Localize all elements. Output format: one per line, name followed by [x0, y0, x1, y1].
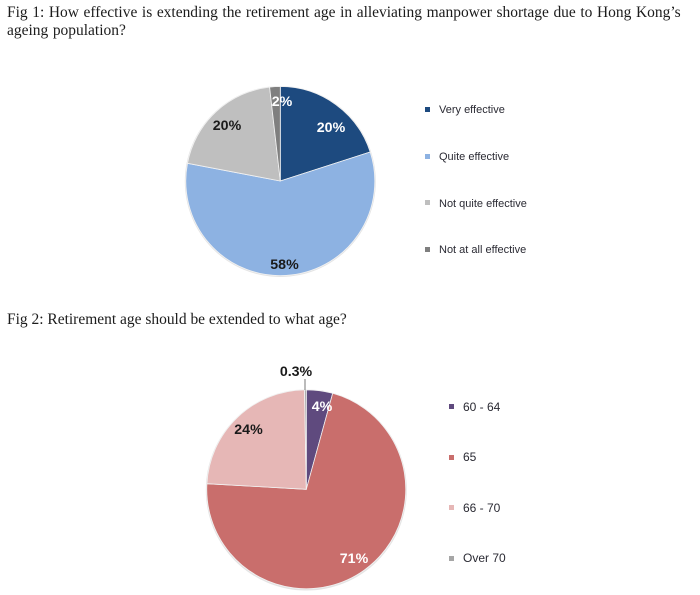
legend: figure 1: Not at all effective	[439, 244, 526, 256]
pie chart: figure 1: 2%	[272, 94, 293, 110]
legend: figure 1: Quite effective	[439, 151, 509, 163]
callout: 0.3% label with leader line: 0.3%	[280, 364, 313, 380]
legend: figure 2: 65	[463, 450, 477, 464]
callout: 0.3% label with leader line	[280, 364, 313, 390]
legend: figure 2	[449, 400, 506, 565]
legend: figure 1: Very effective	[439, 104, 505, 116]
pie chart: figure 1: 20%	[213, 118, 242, 134]
legend: figure 1	[425, 104, 527, 256]
pie chart: figure 1: 58%	[270, 257, 299, 273]
pie chart: figure 2: 24%	[234, 422, 263, 438]
pie chart: figure 2: 4%	[312, 399, 333, 415]
legend: figure 1: Not quite effective	[439, 198, 527, 210]
legend: figure 2: 60 - 64	[463, 400, 501, 414]
heading: figure 1 question	[7, 4, 681, 39]
heading: figure 1 question: Fig 1: How effective is extending the retirement age in alleviating manpower shortage due to Hong Kong’s	[7, 4, 681, 21]
pie chart: figure 1: 20%	[317, 120, 346, 136]
pie chart: figure 2	[206, 390, 407, 590]
pie chart: figure 1	[185, 86, 376, 277]
legend: figure 2: Over 70	[463, 551, 506, 565]
pie chart: figure 2: 71%	[340, 551, 369, 567]
legend: figure 2: 66 - 70	[463, 501, 501, 515]
heading: figure 1 question: ageing population?	[7, 22, 126, 39]
heading: figure 2 question: Fig 2: Retirement age should be extended to what age?	[7, 311, 347, 328]
